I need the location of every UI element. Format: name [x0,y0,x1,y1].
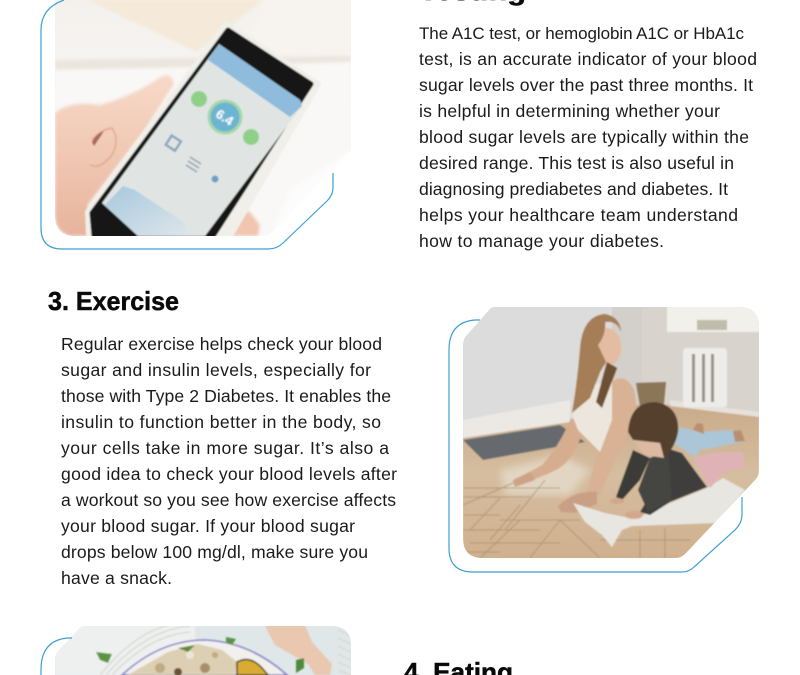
section 3 body text: drops below 100 mg/dl, make sure you [61,542,368,562]
section 2 body text: is helpful in determining whether your [419,101,720,121]
woman's top [572,382,612,452]
phone screen [102,44,302,236]
app chart [105,186,192,236]
radiator [683,348,727,407]
child's face [633,440,664,458]
section 2 body text: desired range. This test is also useful in [419,153,734,173]
section 2 body text: diagnosing prediabetes and diabetes. It [419,179,728,199]
floor [463,405,759,560]
woman's near arm [587,378,636,495]
section 2 body text [419,24,757,251]
section 2 body text: blood sugar levels are typically within the [419,127,749,147]
woman's legs [673,427,743,457]
bowl [122,640,287,675]
section 3 body text: those with Type 2 Diabetes. It enables the [61,386,391,406]
section 2 body text: test, is an accurate indicator of your blood [419,49,757,69]
yoga mat [463,425,585,460]
woman's head and hair [598,328,622,366]
section 2 body text: helps your healthcare team understand [419,205,738,225]
phone bezel [92,30,311,236]
section 3 body text: insulin to function better in the body, so [61,412,381,432]
grains [128,644,237,675]
section 3 body text: sugar and insulin levels, especially for [61,360,371,380]
squash [237,660,268,675]
photo: mother and child exercising [463,300,762,560]
section 2 body text: The A1C test, or hemoglobin A1C or HbA1c [419,24,744,43]
section 3 body text: a workout so you see how exercise affects [61,490,396,510]
section 2 body text: sugar levels over the past three months. It [419,75,753,95]
section 3 body text: your cells take in more sugar. It’s also a [61,438,389,458]
photo: healthy meal bowl [55,625,351,675]
photo: phone with blood sugar app [55,0,351,240]
child's hair [628,402,678,458]
blanket [573,478,745,547]
app header [208,44,302,117]
window [666,307,759,332]
ginger [265,625,332,675]
child's legs [693,452,745,488]
photo: phone with blood sugar app: 6.4 [213,106,237,129]
section 3 body text: your blood sugar. If your blood sugar [61,516,355,536]
photo outline [449,320,742,572]
parquet [463,480,690,558]
phone case [88,24,318,236]
section 3 heading: 3. Exercise [48,286,179,316]
woman's hand [558,492,597,513]
woman's far arm [513,418,583,484]
section 3 body text: have a snack. [61,568,172,588]
child's body [640,447,707,515]
herbs [96,652,112,663]
child's hands [625,511,643,519]
photo outline [41,0,333,249]
section 3 body text [61,334,397,588]
hand [55,75,174,236]
section 2 body text: how to manage your diabetes. [419,231,664,251]
section 3 body text: Regular exercise helps check your blood [61,334,382,354]
section 3 body text: good idea to check your blood levels after [61,464,397,484]
basket [636,382,666,406]
app gauge [209,101,241,133]
photo outline [41,638,72,675]
